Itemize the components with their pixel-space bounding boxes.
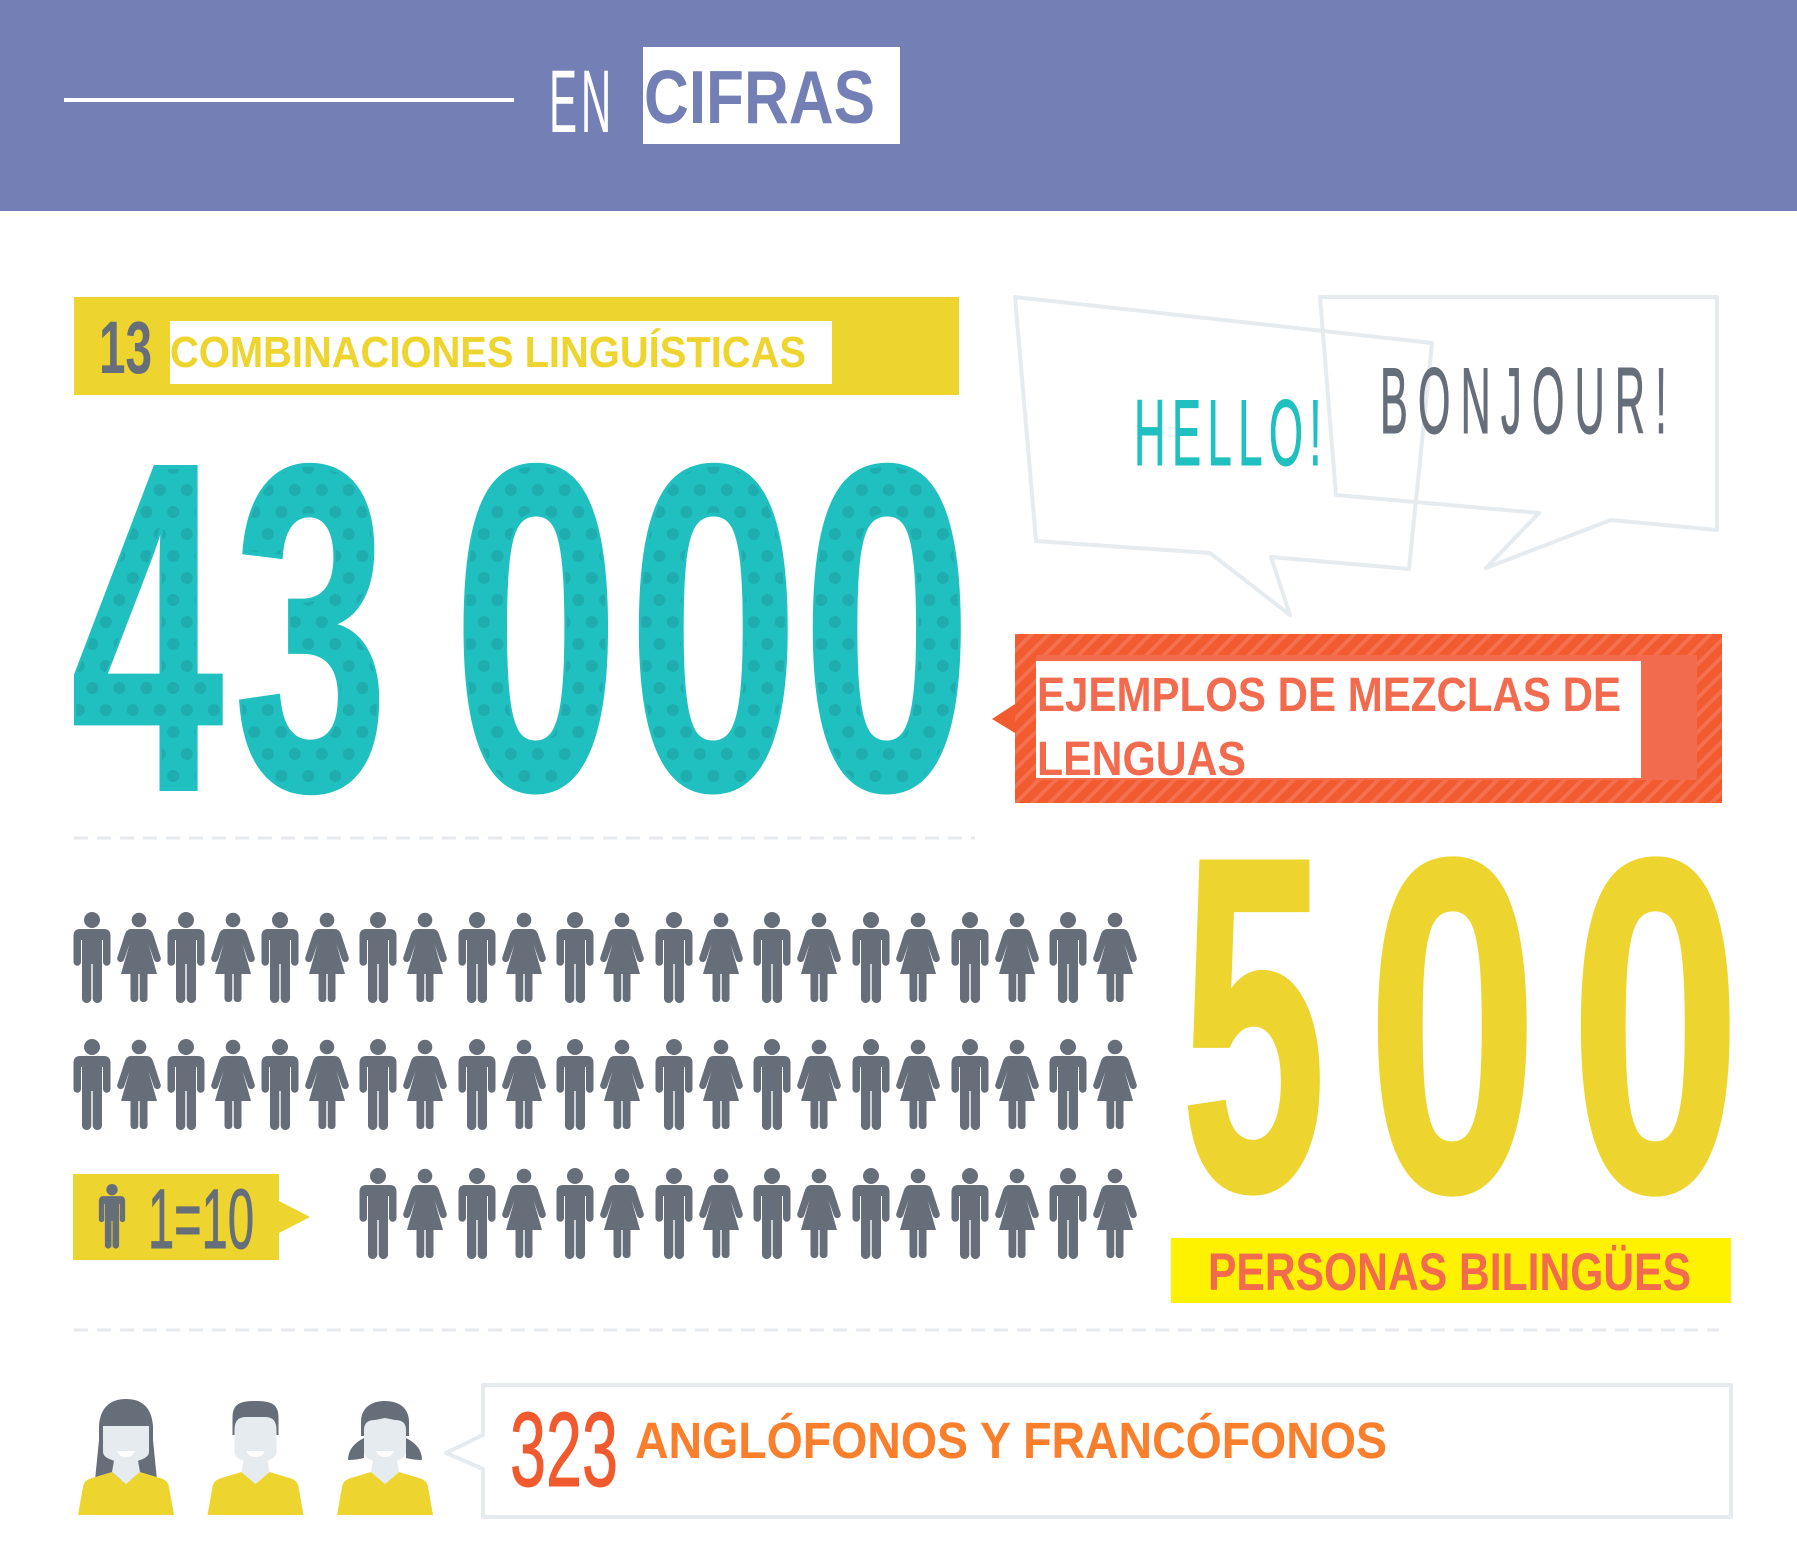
callout text: EJEMPLOS DE MEZCLAS DE xyxy=(1037,669,1621,722)
icon: legend person xyxy=(99,1184,125,1249)
big number 500 xyxy=(1181,758,1741,1291)
legend: 1 = 10: 1=10 xyxy=(148,1172,254,1266)
pictogram row 1 xyxy=(74,912,1137,1003)
avatar: person with short hair xyxy=(208,1401,304,1515)
callout text xyxy=(1037,669,1621,786)
avatar: girl with pigtails xyxy=(337,1401,433,1515)
pictogram row 2 xyxy=(74,1039,1137,1130)
big number 43 000: 0 xyxy=(802,370,972,887)
bubble: bonjour xyxy=(1320,297,1717,568)
callout: 323 anglófonos y francófonos xyxy=(446,1385,1731,1517)
label box: COMBINACIONES LINGUÍSTICAS xyxy=(170,327,806,377)
header band: EN xyxy=(549,51,615,151)
legend: 1 = 10 xyxy=(73,1172,310,1266)
big number 500: 5 xyxy=(1181,758,1326,1290)
pictogram row 3 xyxy=(360,1168,1137,1259)
number 13: 13 xyxy=(99,306,152,389)
avatar: woman with long hair xyxy=(78,1399,174,1515)
big number 43 000: 0 xyxy=(453,370,619,887)
big number 500: 0 xyxy=(1367,760,1538,1291)
number 323: 323 xyxy=(510,1391,618,1509)
big number 43 000: 3 xyxy=(234,370,388,887)
big number 43 000 xyxy=(71,366,972,889)
header band xyxy=(0,0,1797,211)
big number 43 000: 4 xyxy=(71,366,225,889)
callout text: LENGUAS xyxy=(1037,733,1246,786)
big number 43 000: 0 xyxy=(628,370,799,887)
speech bubbles xyxy=(1015,297,1717,615)
banner: 13 combinaciones lingüísticas xyxy=(74,297,959,395)
bubble: hello xyxy=(1015,297,1432,615)
label: personas bilingües: PERSONAS BILINGÜES xyxy=(1208,1243,1691,1302)
callout text: ANGLÓFONOS Y FRANCÓFONOS xyxy=(635,1412,1387,1469)
orange callout: ejemplos de mezclas de lenguas xyxy=(992,634,1722,803)
header word box: CIFRAS: CIFRAS xyxy=(644,55,875,139)
bubble: hello: HELLO! xyxy=(1134,380,1328,485)
